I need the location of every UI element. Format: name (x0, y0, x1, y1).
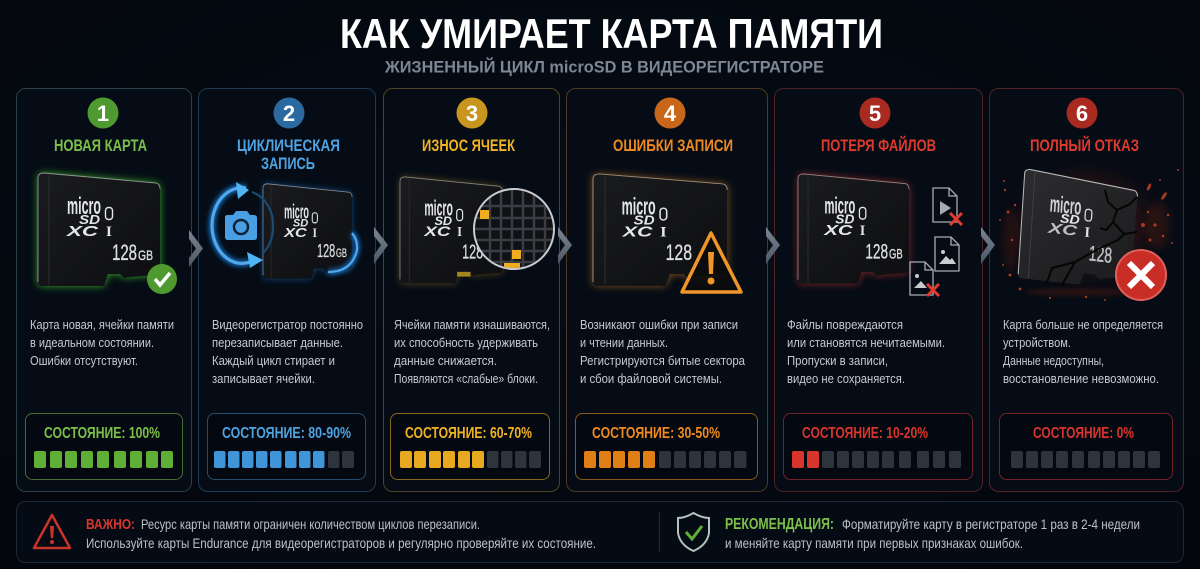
step number 3 (456, 98, 488, 128)
step number 1 (88, 98, 118, 128)
microSD card illustration: I (313, 225, 317, 240)
arrow 1 to 2 (189, 230, 203, 267)
panel: 6 total failure (990, 88, 1184, 492)
microSD card illustration: 128 (666, 240, 692, 265)
microSD card illustration (593, 174, 727, 286)
status box: СОСТОЯНИЕ: 30-50% (592, 425, 720, 442)
microSD card illustration: SD (79, 212, 101, 227)
heading: ОШИБКИ ЗАПИСИ (613, 136, 733, 155)
icon: camera with cycle arrows (212, 182, 357, 272)
broken microSD card illustration: XC (1046, 220, 1079, 240)
arrow 3 to 4 (558, 227, 572, 264)
step number 6 (1066, 98, 1098, 128)
description: перезаписывает данные. (212, 335, 343, 350)
microSD card illustration: I (106, 224, 112, 240)
microSD card illustration: I (860, 223, 866, 239)
description: Карта новая, ячейки памяти (30, 317, 174, 332)
icon: corrupted image file (910, 262, 939, 296)
microSD card illustration: XC (423, 224, 451, 239)
microSD card illustration: GB (336, 247, 347, 260)
important note: Используйте карты Endurance для видеорегистраторов и регулярно проверяйте их состояние. (86, 535, 596, 551)
microSD card illustration: SD (634, 213, 655, 227)
microSD card illustration: 128 (112, 240, 137, 265)
icon: image file (935, 237, 959, 271)
microSD card illustration: XC (66, 223, 100, 240)
description (787, 317, 945, 386)
panel: 5 file loss (774, 88, 982, 492)
description: Регистрируются битые сектора (580, 353, 746, 368)
status box: СОСТОЯНИЕ: 100% (44, 425, 160, 442)
microSD card illustration: XC (283, 225, 307, 240)
step number 3: 3 (466, 101, 478, 126)
microSD card illustration: micro (622, 194, 656, 220)
description: Видеорегистратор постоянно (212, 317, 363, 332)
microSD card illustration: SD (835, 212, 855, 227)
broken microSD card illustration: I (1084, 224, 1091, 241)
heading: ЗАПИСЬ (261, 154, 315, 173)
heading (237, 136, 340, 173)
status box (1000, 414, 1172, 480)
description: Пропуски в записи, (787, 353, 888, 368)
description: записывает ячейки. (212, 371, 315, 386)
status box (26, 414, 182, 480)
heading: ЦИКЛИЧЕСКАЯ (237, 136, 340, 155)
microSD card illustration: 128 (462, 241, 483, 264)
step number 2: 2 (283, 101, 295, 126)
panel: bottom notes (16, 502, 1184, 562)
status box: СОСТОЯНИЕ: 60-70% (405, 425, 532, 442)
magnifier over worn memory cells (474, 189, 554, 269)
microSD card illustration (798, 174, 909, 284)
microSD card illustration (400, 177, 502, 283)
cracks in card (1046, 190, 1137, 285)
microSD card illustration: GB (889, 246, 903, 261)
step number 6: 6 (1076, 101, 1088, 126)
title: КАК УМИРАЕТ КАРТА ПАМЯТИ (340, 10, 883, 57)
description: и чтении данных. (580, 335, 668, 350)
arrow 4 to 5 (766, 227, 780, 264)
microSD card illustration: micro (424, 195, 453, 221)
microSD card illustration: SD (434, 215, 453, 228)
arrow 5 to 6 (981, 227, 995, 264)
description: данные снижается. (394, 353, 497, 368)
microSD card illustration: SD (293, 218, 309, 230)
recommendation note: Форматируйте карту в регистраторе 1 раз в 2-4 недели (842, 516, 1140, 532)
microSD card illustration: I (660, 224, 667, 240)
description: Появляются «слабые» блоки. (394, 371, 538, 386)
description: Возникают ошибки при записи (580, 317, 738, 332)
panel: 3 cell wear (384, 88, 560, 492)
important note (86, 516, 596, 551)
microSD card illustration: micro (67, 193, 101, 220)
icon: warning (34, 515, 70, 548)
description: и сбои файловой системы. (580, 371, 722, 386)
recommendation note: РЕКОМЕНДАЦИЯ: (725, 516, 834, 533)
microSD card illustration: micro (824, 193, 855, 219)
heading: ИЗНОС ЯЧЕЕК (422, 136, 515, 155)
microSD card illustration: micro (284, 201, 309, 224)
broken microSD card illustration (1018, 169, 1138, 290)
description: в идеальном состоянии. (30, 335, 154, 350)
description: Данные недоступны, (1003, 353, 1104, 368)
microSD card illustration: XC (621, 224, 653, 240)
icon: check badge (147, 264, 177, 294)
microSD card illustration: GB (138, 247, 153, 263)
microSD card illustration: 128 (317, 240, 335, 261)
description: или становятся нечитаемыми. (787, 335, 945, 350)
step number 5: 5 (869, 101, 881, 126)
step number 2 (274, 98, 304, 128)
description (30, 317, 174, 368)
heading: ПОЛНЫЙ ОТКАЗ (1030, 136, 1139, 155)
heading: ПОТЕРЯ ФАЙЛОВ (821, 136, 936, 155)
recommendation note: и меняйте карту памяти при первых признаках ошибок. (725, 535, 1023, 551)
step number 1: 1 (97, 101, 109, 126)
status box: СОСТОЯНИЕ: 10-20% (802, 425, 928, 442)
description: восстановление невозможно. (1003, 371, 1159, 386)
heading: НОВАЯ КАРТА (54, 136, 147, 155)
status box (390, 414, 550, 480)
icon: failure cross badge (1116, 250, 1166, 300)
status box (208, 414, 366, 480)
important note: Ресурс карты памяти ограничен количеством циклов перезаписи. (141, 516, 480, 532)
step number 4 (654, 98, 686, 128)
description (1003, 317, 1163, 386)
microSD card illustration: 128 (865, 240, 888, 264)
panel: 4 write errors (566, 88, 768, 492)
description: Файлы повреждаются (787, 317, 903, 332)
icon: corrupted video file (933, 188, 962, 225)
description: Ячейки памяти изнашиваются, (394, 317, 550, 332)
microSD card illustration: I (457, 224, 462, 239)
microSD card illustration (263, 184, 352, 279)
broken microSD card illustration: micro (1049, 190, 1082, 220)
status box (784, 414, 972, 480)
description (394, 317, 550, 386)
description: их способность удерживать (394, 335, 538, 350)
description: устройством. (1003, 335, 1071, 350)
embers around broken card (999, 169, 1179, 301)
description: Ошибки отсутствуют. (30, 353, 138, 368)
step number 4: 4 (664, 101, 677, 126)
description: Каждый цикл стирает и (212, 353, 335, 368)
description: Карта больше не определяется (1003, 317, 1163, 332)
panel: 2 cyclic recording (198, 88, 376, 492)
description (580, 317, 746, 386)
important note: ВАЖНО: (86, 516, 135, 533)
broken microSD card illustration: 128 (1088, 242, 1113, 268)
microSD card illustration: XC (823, 222, 854, 238)
broken microSD card illustration: SD (1060, 211, 1080, 227)
status box: СОСТОЯНИЕ: 0% (1033, 425, 1134, 442)
subtitle: ЖИЗНЕННЫЙ ЦИКЛ microSD В ВИДЕОРЕГИСТРАТОРЕ (384, 58, 824, 76)
description: видео не сохраняется. (787, 371, 905, 386)
icon: warning triangle (682, 233, 741, 292)
step number 5 (860, 98, 890, 128)
description (212, 317, 363, 386)
arrow 2 to 3 (374, 227, 388, 264)
icon: shield (678, 513, 709, 551)
status box: СОСТОЯНИЕ: 80-90% (222, 425, 351, 442)
panel: 1 new card (16, 88, 192, 492)
status box (576, 414, 758, 480)
microSD card illustration (38, 173, 160, 286)
recommendation note (725, 516, 1140, 551)
